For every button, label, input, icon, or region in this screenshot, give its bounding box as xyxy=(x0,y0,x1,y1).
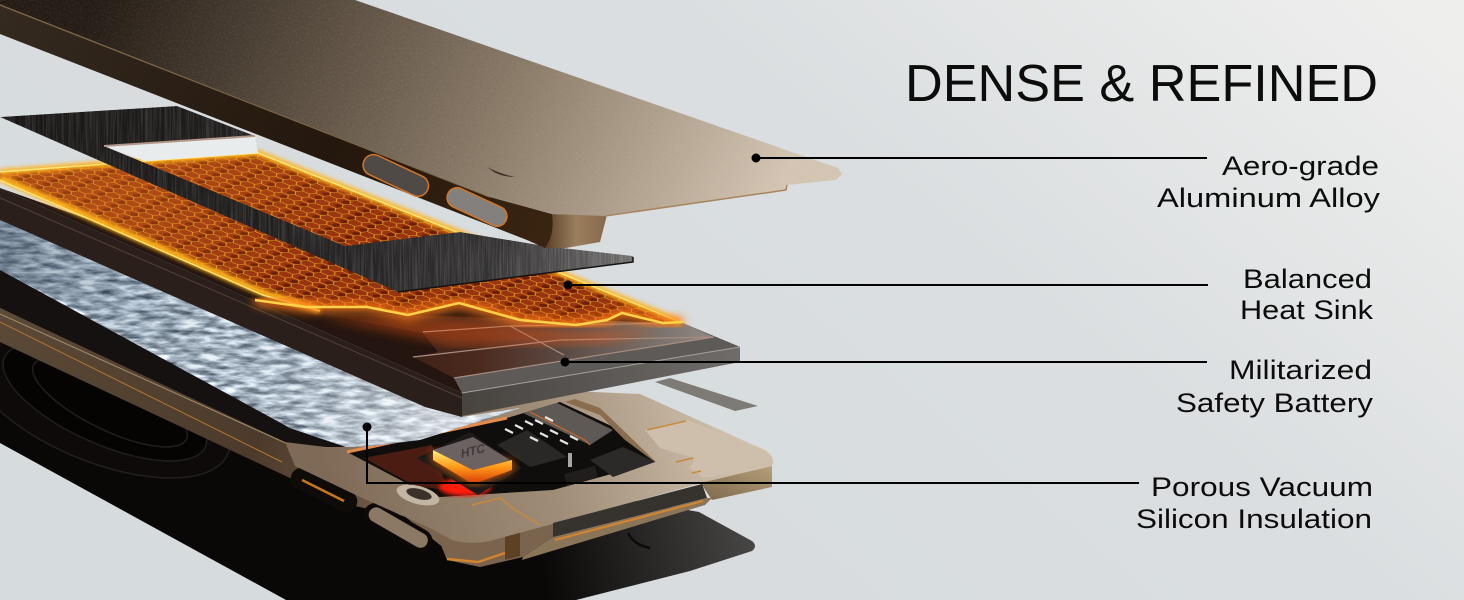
side button xyxy=(359,499,437,557)
glowing processor xyxy=(417,432,522,495)
front corner xyxy=(437,523,553,567)
callout: aluminum alloy: Aluminum Alloy xyxy=(1157,183,1381,213)
callout: heat sink: Heat Sink xyxy=(1240,295,1374,325)
camera ellipse xyxy=(394,481,442,509)
USB port xyxy=(287,464,361,516)
chip glow xyxy=(439,478,491,496)
button pill xyxy=(360,151,432,200)
black layer under insulation xyxy=(0,262,346,447)
callout: silicon insulation: Porous Vacuum xyxy=(1151,472,1373,502)
callout: silicon insulation: Silicon Insulation xyxy=(1136,504,1372,534)
device side band xyxy=(0,308,520,567)
tray top face xyxy=(0,188,740,393)
glowing edges xyxy=(0,153,680,322)
glowing heat sink sheet xyxy=(0,136,683,325)
callout: silicon insulation xyxy=(362,422,1373,534)
button pill 2 xyxy=(444,184,510,230)
callout: aluminum alloy xyxy=(752,151,1381,213)
plate side wall xyxy=(0,3,566,248)
flame line xyxy=(255,300,683,325)
brushed metal frame xyxy=(0,100,640,300)
callout: safety battery: Safety Battery xyxy=(1176,388,1374,418)
title: DENSE & REFINED xyxy=(905,55,1378,113)
bottom black plate xyxy=(0,295,755,600)
glowing processor: HTC xyxy=(461,441,485,461)
callout: safety battery: Militarized xyxy=(1229,355,1372,385)
device rear side xyxy=(700,465,772,500)
flame reflection on tray xyxy=(320,318,660,345)
plate top face xyxy=(0,0,842,216)
ribbon connector xyxy=(655,378,758,411)
small mark xyxy=(487,167,515,177)
callout: safety battery xyxy=(560,355,1374,418)
tray side right xyxy=(462,347,740,416)
background seen through frame window xyxy=(104,136,258,161)
aluminum alloy plate xyxy=(0,0,860,248)
silicon insulation layer xyxy=(0,210,530,455)
circuit board opening xyxy=(347,402,655,497)
heat sink tray xyxy=(0,188,740,417)
front slot xyxy=(553,484,707,537)
tray side left xyxy=(0,188,462,417)
device top face xyxy=(285,391,773,543)
torn cover edge xyxy=(565,399,657,463)
wireless charging rings xyxy=(0,295,250,509)
memory strips xyxy=(523,403,613,445)
right lighter plate xyxy=(645,420,773,478)
callout: heat sink xyxy=(564,264,1374,325)
IC chips xyxy=(497,430,567,467)
plate post xyxy=(545,214,607,248)
callout: aluminum alloy: Aero-grade xyxy=(1222,151,1379,181)
callout: heat sink: Balanced xyxy=(1243,264,1372,294)
lower device body xyxy=(0,308,773,567)
